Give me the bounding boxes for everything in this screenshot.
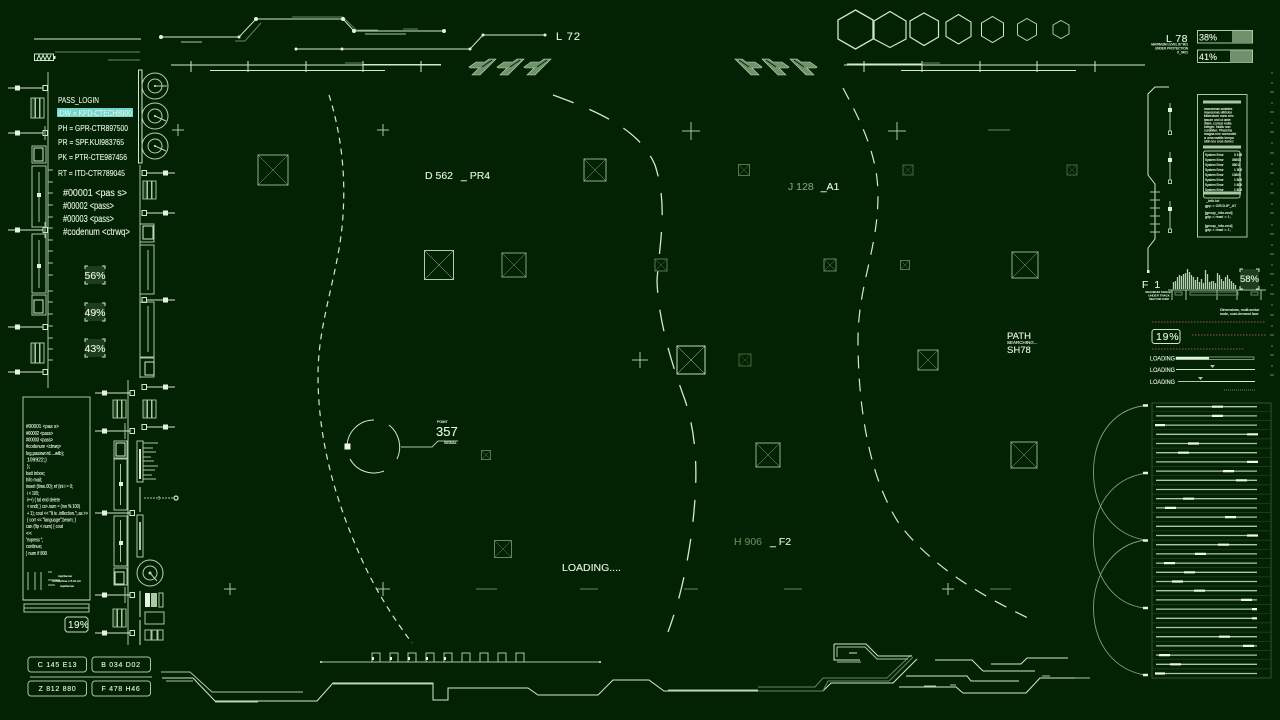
left chevrons [469,59,551,75]
icon: target dial [137,560,163,586]
card paragraph: curabitur. Pharetra [1204,129,1232,133]
caption: node, cost-demand face [1220,312,1259,316]
card footer code: _info.txt [1205,199,1220,203]
code text: { corr << "language";bearn; } [27,518,76,524]
chip: 58 percent: 58% [1240,274,1260,285]
target grid markers [258,155,1077,558]
percent chips: 49% [84,307,106,319]
card paragraph: a urna mattis tempu [1204,136,1234,140]
login text block: PR = SPF.KUI983765 [58,137,124,147]
card paragraph: integer. Nulla non [1204,125,1231,129]
right edge ticks [1270,72,1274,375]
L78 readout: UNDER PROTECTION [1155,46,1189,50]
card paragraph: maecenas ultricies [1204,111,1232,115]
card paragraph [1204,107,1236,143]
card table: 13805 [1232,173,1241,177]
card footer code: gpp = GROUP_AT [1205,204,1237,208]
list of track rows [1152,403,1271,678]
card footer code: gdp = read = 1; [1205,215,1231,219]
hexagons [838,10,1069,49]
radar dial with readout: 357 [436,424,458,439]
crosshairs and dashes [172,122,954,596]
percent chips: 43% [84,343,106,355]
chip: 19 percent left: 19% [68,620,89,631]
L78 readout: X_0401 [1177,50,1188,54]
code text: + 1); cout << "It is .inflection.";.as >> [27,511,88,517]
tree diagram: AXMachine 1.5.01.03 [52,579,81,583]
panel: circular gauges [138,70,168,163]
icon: battery [34,54,56,60]
pass codes [63,188,130,238]
radar dial with readout: SIGNAL [444,441,457,445]
card table: 0 148 [1234,153,1242,157]
L78 readout [1151,33,1189,54]
pass codes: #00003 <pass> [63,214,114,225]
card table: 08553 [1232,158,1241,162]
card footer code: gdp = read = 1; [1205,228,1231,232]
top right ruler [844,61,1145,72]
login text block: PK = PTR-CTE987456 [58,152,127,162]
bottom ruler with tabs [320,653,601,663]
code text: #00001 <pas s> [26,424,59,430]
pass codes: #00002 <pass> [63,201,114,212]
card table: System Error [1205,183,1225,187]
label: path [1007,331,1038,356]
login text block: PH = GPR-CTR897500 [58,123,128,133]
code text: < endl; } cs>.num = (inn % 100) [27,504,80,510]
tree diagram: AppServer [58,574,72,578]
progress bar: 41 percent [1198,50,1252,62]
caption: Dimensions, multi-sector [1220,308,1260,312]
F1 label: UNDER TRACK [1148,294,1170,298]
percent chips: 56% [84,270,106,282]
top left circuit lines [159,17,546,50]
F1 label: F 1 [1142,279,1162,291]
code text: continue; [26,544,42,550]
chip: 58 percent [1240,269,1260,289]
dashed curve: left [318,95,412,643]
label: path: SEARCHING... [1007,340,1038,345]
progress bar: 38 percent [1198,30,1252,43]
card paragraph: ipsum orci ut ante [1204,118,1231,122]
F1 label [1142,279,1173,301]
loading bars: LOADING [1150,367,1175,374]
panel: left top status [34,39,141,60]
code text: i < 100; [27,491,39,497]
card table: System Error [1205,168,1225,172]
card table: System Error [1205,173,1225,177]
chip: 19 percent right: 19% [1156,331,1179,343]
code text: #00002 <pass> [26,431,53,437]
card footer code: [group_info.end] [1205,224,1232,228]
code text: i++) { tal end delete [27,498,60,504]
loading bars: LOADING [1150,356,1175,362]
login text block [57,95,133,178]
bar chart [1168,269,1266,300]
code text: "express "; [26,538,43,544]
card footer code: [group_info.end] [1205,211,1232,215]
bottom circuit lines [161,644,1090,702]
code text: #codenum <ctrwq> [26,444,61,450]
bracket with sliders [1147,87,1172,273]
label: L72: L 72 [556,31,581,43]
login text block: RT = ITD-CTR789045 [58,168,125,178]
pass codes: #codenum <ctrwq> [63,227,130,238]
panel: bottom left code buttons: F 478 H46 [102,686,140,693]
label: J128: J 128 _A1 [788,181,840,193]
card table: 1 808 [1234,178,1242,182]
label: path: SH78 [1007,345,1031,356]
card table: System Error [1205,163,1225,167]
percent chips [84,266,106,357]
L78 readout: MAXIMUM LEVEL 87 901 [1151,42,1188,46]
card paragraph: diam, cursus nulla [1204,121,1231,125]
code text: } num if 800 [26,551,47,557]
card paragraph: bibendum nunc nec [1204,114,1234,118]
code text: batt inbox; [26,471,45,477]
login text block: PASS_LOGIN [58,95,99,105]
code text [26,424,88,557]
panel: code box [23,397,90,612]
panel: bottom left code buttons: C 145 E13 [38,662,77,669]
loading bars: LOADING [1150,379,1175,386]
F1 label: MAXIMUM TARGET [1145,290,1173,294]
label: D562: D 562 _ PR4 [425,170,490,182]
linking arcs [1094,406,1148,675]
radar dial with readout [344,420,458,473]
code text: insert {time.00}; nf (ini i = 0; [26,484,73,490]
card table: 08011 [1232,163,1241,167]
right chevrons [735,59,817,75]
code text: log.password....wtb); [26,451,64,457]
code text: can (ftp < num) { cout [26,524,63,530]
panel: middle sliders column [140,165,175,430]
pass codes: #00001 <pas s> [63,188,127,199]
card table: System Error [1205,188,1225,192]
panel: bottom left code buttons: B 034 D02 [101,662,141,669]
progress bar: 41 percent: 41% [1199,52,1217,62]
card table: System Error [1205,158,1225,162]
L78 readout: L 78 [1166,33,1188,45]
card paragraph: magna nec consectet [1204,132,1236,136]
top left ruler [171,61,441,72]
red dotted rules [1152,322,1266,349]
card table: System Error [1205,178,1225,182]
label: loading: LOADING.... [562,562,621,574]
card table: 1 308 [1234,168,1242,172]
panel: document card [1198,94,1247,237]
dashed curve: right [843,88,1030,619]
code text: #00003 <pass> [26,438,53,444]
label: path: PATH [1007,331,1031,342]
card paragraph: nibh leo eros donec [1204,139,1234,143]
card footer code [1205,199,1237,232]
panel: bottom left code buttons [28,657,152,696]
caption [1220,308,1260,316]
code text: hifo mail; [26,478,42,484]
icon: block grid [140,591,164,645]
tree diagram: AppServer [60,584,74,588]
F1 label: SECTOR 0402 [1149,297,1169,301]
card table: System Error [1205,153,1225,157]
panel: bottom left code buttons: Z 812 880 [39,686,76,693]
dotted slider [140,487,178,512]
loading bars [1150,356,1256,390]
dashed curve: centre [553,95,696,632]
card paragraph: maecenas sodales [1204,107,1233,111]
chip: 19 percent left [65,617,89,632]
panel: left sliders column [8,72,53,388]
card table: 1 808 [1234,188,1242,192]
icon: comb [137,441,158,482]
code text: }; [27,464,30,470]
highlighted row: IDW = KPD-CTECH8900 [58,108,132,118]
progress bar: 38 percent: 38% [1199,32,1217,42]
card table [1204,151,1242,198]
radar dial with readout: POINT [437,420,449,424]
label: H906: H 906 _ F2 [734,536,791,548]
panel: lower sliders column [95,380,134,645]
dim dashes [476,130,1011,589]
code text: << [26,531,32,537]
vertical tag [137,515,143,557]
card table: 1 808 [1234,183,1242,187]
tree diagram [28,572,81,590]
code text: 109922;) [27,458,47,464]
